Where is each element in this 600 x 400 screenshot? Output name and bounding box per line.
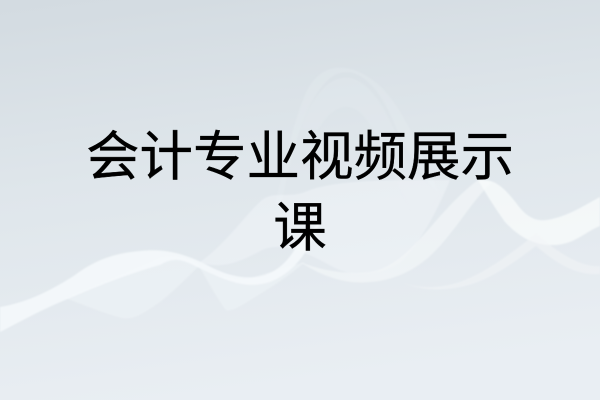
right ribbon (478, 180, 600, 245)
lower fold ribbon (65, 256, 200, 318)
title: 会计专业视频展示课 (86, 128, 514, 258)
lower right band (400, 234, 600, 289)
main ribbon (0, 222, 320, 332)
centre sheet ribbon (200, 180, 450, 274)
upper loop ribbon (275, 68, 440, 205)
right rising band (300, 180, 492, 283)
